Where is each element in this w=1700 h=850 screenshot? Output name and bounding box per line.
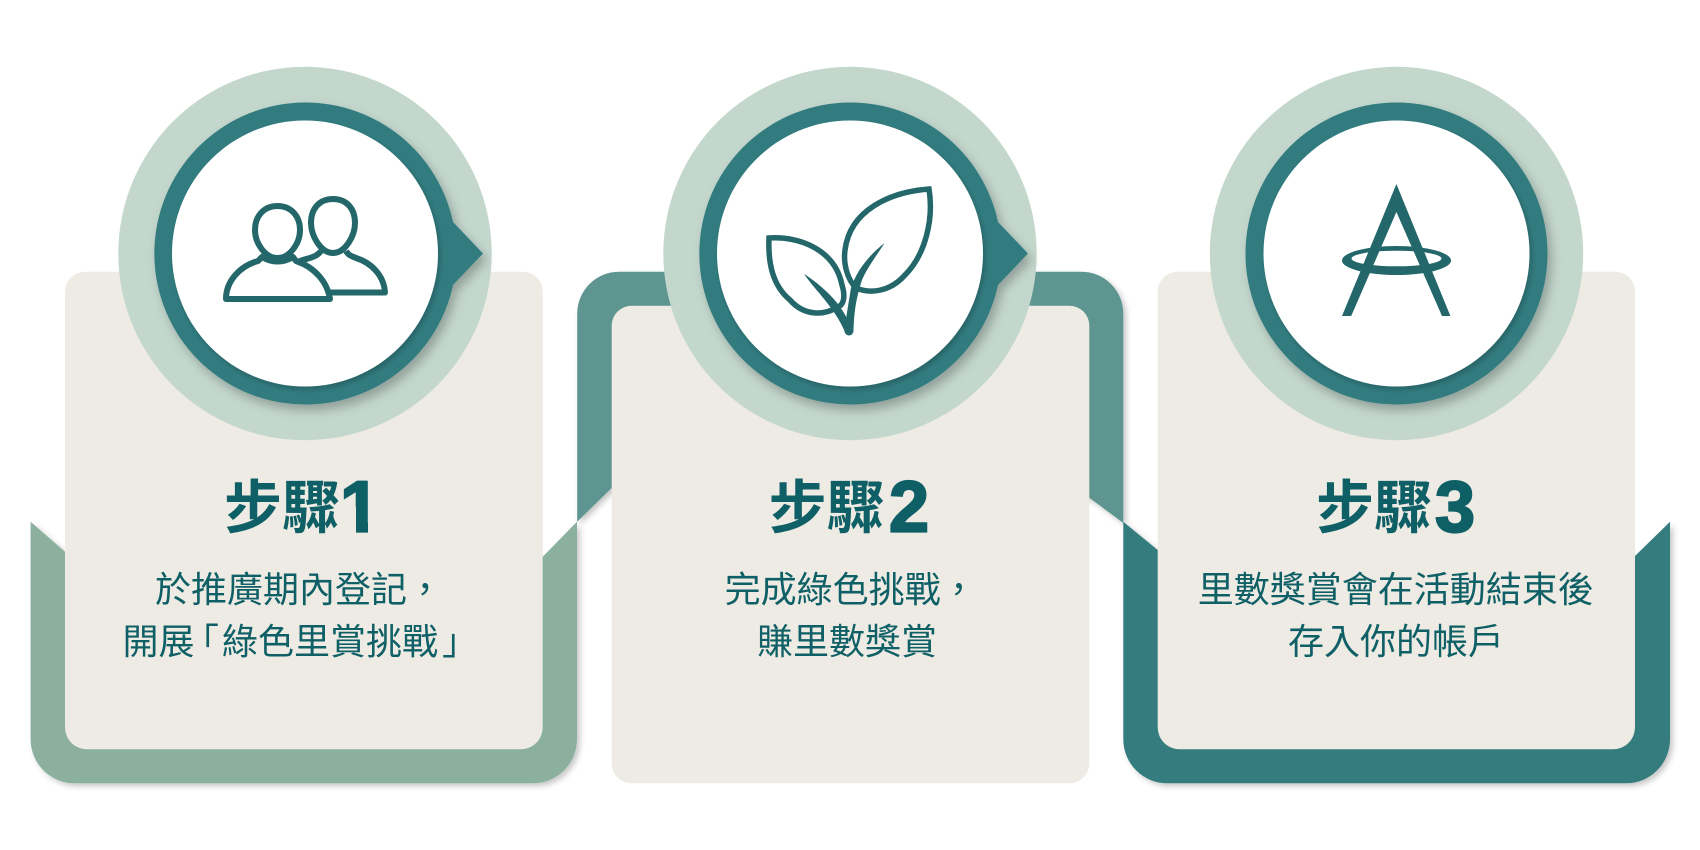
step 3 description: 存入你的帳戶 <box>1288 621 1504 662</box>
panel 1 green frame <box>31 522 577 783</box>
step 3 badge <box>1210 67 1583 440</box>
step 3 description: 里數獎賞會在活動結束後 <box>1198 569 1594 610</box>
panel 2 beige card <box>612 306 1089 783</box>
panel 3 green frame <box>1123 522 1670 783</box>
step 3 title: 步驟 <box>1316 476 1432 541</box>
icon: leaves <box>769 189 930 336</box>
outer circle <box>118 67 492 440</box>
step 3 description <box>1198 569 1594 662</box>
step 3 title <box>1316 468 1475 548</box>
step 1 title: 步驟 <box>224 476 340 541</box>
icon: letter A with orbit ring <box>1342 184 1451 316</box>
white disc <box>1264 120 1530 386</box>
step 1 description: 於推廣期內登記， <box>155 569 443 610</box>
panel 3 beige card <box>1158 272 1635 749</box>
panel 2 green frame <box>577 272 1123 523</box>
step 2 description <box>725 569 977 662</box>
step 2 title <box>769 468 929 548</box>
white disc <box>172 120 438 386</box>
ring with arrow <box>154 102 483 404</box>
step 2 title: 步驟 <box>769 476 885 541</box>
panel: step 3 <box>1123 67 1670 783</box>
step 1 description: 綠色里賞挑戰 <box>222 621 438 662</box>
step 1 description: 開展 <box>122 621 195 662</box>
step 2 description: 完成綠色挑戰， <box>725 569 977 610</box>
step 1 badge <box>118 67 492 440</box>
step 1 description <box>122 569 478 662</box>
panel: step 1 <box>31 67 577 783</box>
panel: step 2 <box>577 67 1123 783</box>
step 1 description: 」 <box>442 621 478 662</box>
panel 1 beige card <box>65 272 543 749</box>
ring <box>1246 102 1548 404</box>
step 3 title: 3 <box>1435 468 1475 548</box>
step 1 title: 1 <box>340 468 380 548</box>
icon: two people <box>226 199 385 299</box>
white disc <box>717 120 983 386</box>
step 1 description: 「 <box>183 621 219 662</box>
step 2 badge <box>663 67 1037 440</box>
outer circle <box>663 67 1037 440</box>
step 2 title: 2 <box>889 468 929 548</box>
step 1 title <box>226 478 368 534</box>
step 2 description: 賺里數獎賞 <box>757 621 937 662</box>
outer circle <box>1210 67 1583 440</box>
ring with arrow <box>699 102 1028 404</box>
